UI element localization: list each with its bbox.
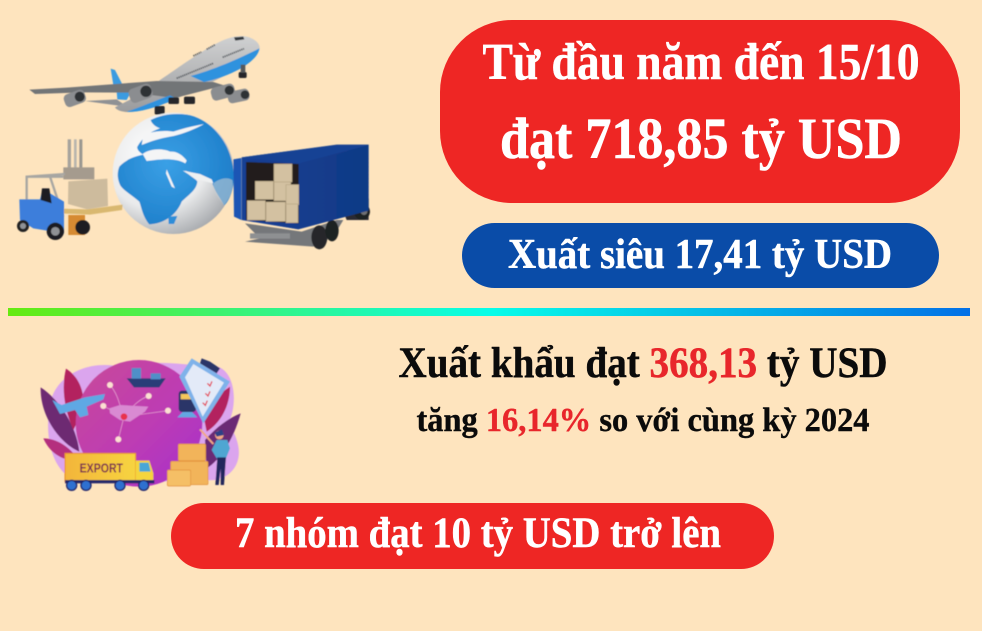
icon: person: [200, 429, 230, 485]
icon: airplane: [29, 36, 260, 115]
text: export growth: tăng 16,14% so với cùng kỳ 2024: [416, 402, 870, 439]
heading: period: Từ đầu năm đến 15/10: [482, 34, 920, 91]
panel: trade surplus pill: [462, 223, 939, 288]
divider: gradient bar: [8, 308, 970, 316]
route map: [100, 382, 171, 442]
icon: ship: [127, 368, 166, 387]
panel: total trade headline pill: [440, 20, 960, 203]
engines: [62, 82, 250, 108]
text: trade surplus: Xuất siêu 17,41 tỷ USD: [508, 232, 892, 278]
heading: total value: đạt 718,85 tỷ USD: [500, 106, 902, 171]
text: seven groups: 7 nhóm đạt 10 tỷ USD trở lên: [235, 510, 721, 557]
icon: parcel boxes: [167, 444, 208, 486]
landing gear: [155, 65, 247, 115]
icon: globe: [113, 113, 234, 234]
panel: seven groups pill: [171, 503, 774, 569]
icon: plane: [52, 394, 105, 417]
label: export: EXPORT: [80, 461, 123, 476]
text: export value: Xuất khẩu đạt 368,13 tỷ USD: [398, 340, 888, 387]
illustration: export concept: [41, 358, 241, 490]
icon: clipboard checklist: [179, 358, 230, 423]
illustration: plane, globe, forklift and container truck: [17, 36, 370, 249]
icon: export truck: [65, 453, 154, 490]
icon: container truck: [233, 145, 370, 249]
background blobs and leaves: [41, 363, 241, 483]
icon: forklift with boxes: [17, 139, 123, 240]
globe: [76, 360, 202, 487]
icon: train: [177, 391, 197, 417]
